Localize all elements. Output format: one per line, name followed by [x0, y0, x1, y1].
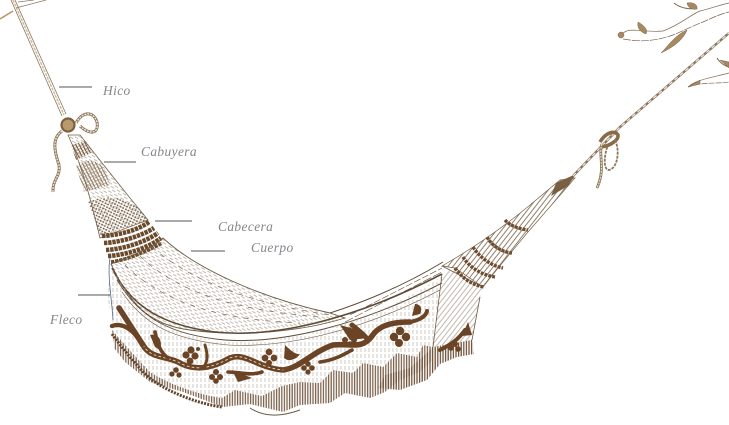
net body: cuerpo — [111, 238, 345, 333]
label: Fleco: Fleco — [49, 312, 82, 327]
ribbon leaves — [618, 3, 729, 87]
flower 2 — [209, 369, 223, 384]
label: Cabecera: Cabecera — [218, 219, 273, 234]
rope: hico right — [573, 33, 729, 176]
skirt panel — [108, 258, 442, 398]
right head — [442, 174, 576, 287]
flower 6 — [390, 327, 410, 347]
flower 7 — [169, 367, 182, 378]
top-left ribbon — [0, 0, 46, 19]
right side panel — [433, 266, 483, 347]
label: Hico: Hico — [102, 83, 131, 98]
right head: cabecera bands — [455, 220, 528, 287]
right upper strip — [112, 262, 443, 345]
label: Cuerpo: Cuerpo — [251, 240, 294, 255]
fringe: fleco — [112, 330, 474, 415]
flower 1 — [182, 346, 200, 364]
flower 3 — [262, 349, 277, 366]
ribbons top right — [622, 3, 729, 87]
rope: hico left — [11, 0, 66, 116]
left knot and cords — [53, 114, 97, 192]
right knot and cords — [597, 132, 618, 188]
flower 8 — [448, 341, 461, 352]
flower 4 — [301, 361, 315, 375]
label: Cabuyera: Cabuyera — [141, 144, 197, 159]
flower 5 — [342, 332, 357, 347]
leader lines — [59, 87, 225, 295]
left head: cabecera bands — [102, 222, 162, 262]
vine leaves and flowers — [150, 304, 472, 384]
left head: cabuyera — [68, 135, 148, 238]
vine ornament — [112, 308, 465, 374]
